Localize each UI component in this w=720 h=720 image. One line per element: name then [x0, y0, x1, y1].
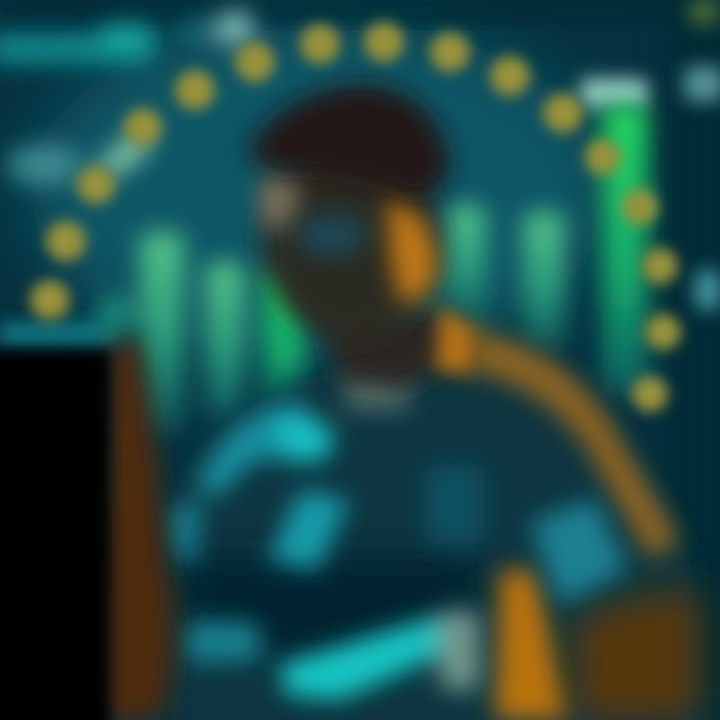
person: neck [320, 310, 470, 390]
person: hair [248, 85, 450, 200]
shoulder: orange rim light [470, 330, 680, 560]
right glowing labels [580, 0, 720, 312]
left glowing label [7, 125, 158, 185]
shirt: cyan highlights [165, 365, 628, 700]
laptop edge: orange glow [100, 340, 174, 720]
top-left glowing label [0, 10, 254, 64]
bar chart: green bars [98, 105, 648, 432]
face: orange side light [389, 195, 438, 302]
person: face [258, 140, 478, 375]
shirt: dark lower folds [180, 560, 480, 660]
shirt: bottom-right orange glow [495, 570, 570, 720]
laptop: black silhouette [0, 350, 110, 720]
dotted arc: yellow coins [30, 22, 681, 412]
person: torso and shirt [165, 330, 700, 720]
